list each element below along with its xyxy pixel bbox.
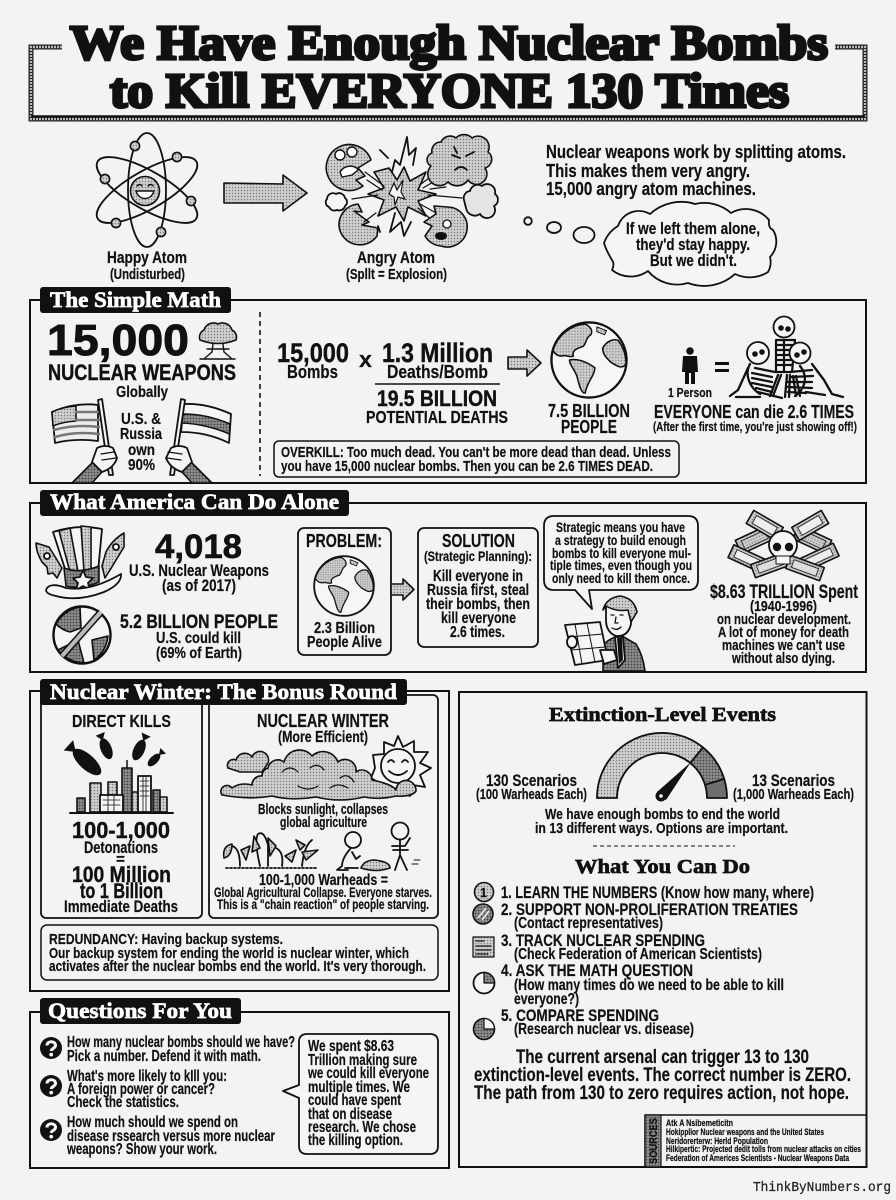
action 5: compare spending: 5. COMPARE SPENDING [501,1006,659,1025]
callout: overkill: you have 15,000 nuclear bombs. Then you can be 2.6 TIMES DEAD. [281,459,653,475]
icon: uncle sam hat with rockets [36,526,124,598]
sources box: Atk A Nsibemeticitn [666,1118,733,1128]
speech bubble: we spent: we could kill everyone [307,1065,429,1082]
stat: 4,018 weapons [129,528,269,595]
heading: what you can do: What You Can Do [575,856,750,878]
stat: 5.2 billion people: (69% of Earth) [156,645,242,662]
stat: 5.2 billion people: U.S. could kill [156,630,241,647]
icon: mushroom cloud [199,323,237,359]
title text: to Kill EVERYONE 130 Times [110,63,789,118]
action 1: learn the numbers [474,882,814,902]
heading: the simple math: The Simple Math [50,287,221,312]
thought text: they'd stay happy. [636,236,750,254]
icon: skeleton pile [730,316,843,398]
intro text: This makes them very angry. [546,160,750,181]
stat: $8.63 trillion [710,581,858,667]
action 3: track spending: 3. TRACK NUCLEAR SPENDING [501,931,705,950]
stat: 7.5 billion people: 7.5 BILLION [548,401,630,421]
question 3 [40,1114,275,1158]
stat: direct kills numbers [64,817,178,916]
panel: nuclear winter [30,679,449,991]
stat: direct kills numbers: 100 Million [72,862,171,887]
thought text: If we left them alone, [626,220,760,238]
sources box [645,1115,866,1167]
speech bubble: we spent: multiple times. We [308,1079,410,1096]
question 1: How many nuclear bombs should we have? [67,1034,295,1051]
question 2: Check the statistics. [67,1094,179,1111]
stat: direct kills numbers: = [116,851,125,868]
speech bubble: we spent: research. We chose [308,1119,416,1136]
action 4: ask the math question: 4. ASK THE MATH QUESTION [501,961,693,980]
icon: smiling sun [371,736,431,796]
action 2: support treaties: (Contact representatives) [514,915,663,932]
question 2: A foreign power or cancer? [67,1081,215,1098]
question 1: Pick a number. Defend it with math. [67,1048,261,1065]
speech bubble: strategic: only need to kill them once. [552,570,690,586]
question 3: How much should we spend on [67,1114,238,1131]
box: nuclear winter: This is a "chain reaction" of people starving. [217,897,429,912]
stat: 4,018 weapons: (as of 2017) [162,577,236,595]
footer credit: ThinkByNumbers.org [753,1181,891,1196]
box: solution: Russia first, steal [427,582,529,599]
box: nuclear winter: Global Agricultural Collapse. Everyone starves. [214,885,432,900]
icon: one person [668,347,729,400]
stat: $8.63 trillion: A lot of money for death [718,625,849,641]
callout: redundancy [41,925,438,980]
thought cloud [524,202,776,286]
action 2: support treaties: 2. SUPPORT NON-PROLIFERATION TREATIES [501,900,798,919]
label: angry atom: (Spllt = Explosion) [346,267,447,283]
icon: smoke cloud [221,750,416,800]
icon: one person: 1 Person [668,386,712,400]
label: happy atom: Happy Atom [107,248,187,267]
icon: bombs over city [63,732,173,813]
gauge caption: We have enough bombs to end the world [545,806,780,823]
box: direct kills [41,695,202,918]
equation: bombs times deaths: Bombs [287,362,338,382]
panel: the simple math [30,287,866,483]
stat: 4,018 weapons: U.S. Nuclear Weapons [129,562,269,580]
sources box: Neridorerterw: Herld Population [666,1136,768,1146]
panel: extinction and actions [459,692,866,1167]
icon: man reading map [565,596,645,671]
box: nuclear winter: global agriculture [280,815,367,831]
intro text [546,141,846,199]
gauge label: 130 scenarios: (100 Warheads Each) [476,787,587,803]
intro text: 15,000 angry atom machines. [546,178,756,199]
heading: nuclear winter: Nuclear Winter: The Bonus Round [50,679,397,704]
icon: dying plants [224,833,318,868]
stat: 15,000 weapons [47,316,236,401]
closing statement: The current arsenal can trigger 13 to 130 [516,1047,809,1068]
speech bubble: strategic [544,516,698,609]
speech bubble: strategic: a strategy to build enough [555,532,686,548]
stat: $8.63 trillion: on nuclear development. [717,612,851,628]
box: problem: PROBLEM: [306,531,382,551]
stat: direct kills numbers: Detonations [84,839,158,857]
stat: 7.5 billion people: PEOPLE [561,417,617,437]
icon: earth [551,322,627,398]
closing statement [474,1047,851,1104]
box: problem [298,528,391,655]
stat: $8.63 trillion: machines we can't use [722,638,845,654]
action 4: ask the math question [474,961,784,1008]
callout: redundancy: REDUNDANCY: Having backup systems. [49,931,283,948]
callout: redundancy: activates after the nuclear bombs end the world. It's very thorough. [49,958,426,975]
callout: overkill [274,441,679,477]
speech bubble: strategic: bombs to kill everyone mul- [552,545,691,561]
text: US and Russia own 90%: Russia [120,426,162,443]
arrow: deaths to people [508,350,541,376]
stat: 15,000 weapons: Globally [116,384,168,401]
callout: redundancy: Our backup system for ending the world is nuclear winter, which [49,945,409,962]
arrow: problem to solution [391,579,414,600]
box: solution: (Strategic Planning): [424,548,532,564]
callout: overkill: OVERKILL: Too much dead. You can't be more dead than dead. Unless [281,445,671,461]
gauge label: 13 scenarios: (1,000 Warheads Each) [733,787,854,803]
speech bubble: strategic: tiple times, even though you [550,557,692,573]
equation: bombs times deaths: POTENTIAL DEATHS [366,407,508,427]
gauge chart [597,733,727,802]
question 3: weapons? Show your work. [66,1141,217,1158]
equation: bombs times deaths: x [359,347,373,372]
speech bubble: we spent: We spent $8.63 [308,1038,394,1055]
thought text [626,220,760,270]
speech bubble: we spent: Trillion making sure [308,1052,417,1069]
box: solution: 2.6 times. [450,624,505,641]
action 1: learn the numbers: 1 [480,885,487,900]
speech bubble: we spent: that on disease [308,1106,392,1123]
label: angry atom: Angry Atom [357,248,435,267]
label: angry atom [346,248,447,283]
title banner [31,15,865,119]
text: everyone can die 2.6 times [653,402,857,434]
icon: happy atom [88,133,206,247]
gauge label: 130 scenarios: 130 Scenarios [486,772,577,790]
gauge caption: in 13 different ways. Options are important. [535,820,788,837]
stat: 15,000 weapons: 15,000 [47,316,189,365]
action 2: support treaties [473,900,798,932]
text: US and Russia own 90%: U.S. & [121,411,161,428]
equation: bombs times deaths: 19.5 BILLION [377,386,497,411]
equation: bombs times deaths: Deaths/Bomb [387,362,488,382]
icon: crossed flags with hands [52,399,231,483]
box: solution [418,528,538,647]
box: nuclear winter: NUCLEAR WINTER [257,711,389,731]
box: solution: Kill everyone in [433,568,523,585]
action 5: compare spending: (Research nuclear vs. disease) [514,1021,694,1038]
equation: bombs times deaths: 15,000 [277,338,349,368]
heading: questions for you: Questions For You [48,998,232,1023]
stat: 5.2 billion people [120,612,278,662]
box: nuclear winter: (More Efficient) [278,729,368,746]
speech bubble: we spent [283,1034,438,1154]
action 4: ask the math question: (How many times do we need to be able to kill [514,977,784,994]
heading: extinction-level events: Extinction-Level Events [549,704,776,726]
action 4: ask the math question: everyone?) [514,991,579,1008]
stat: 4,018 weapons: 4,018 [155,528,242,566]
label: happy atom [107,248,187,283]
icon: cash pile with skull [728,510,839,581]
stat: direct kills numbers: 100-1,000 [72,817,170,843]
box: solution: their bombs, then [426,596,530,613]
heading: what america can do alone: What America Can Do Alone [50,489,339,514]
box: problem: People Alive [307,634,382,651]
gauge caption [535,806,788,837]
box: direct kills: DIRECT KILLS [72,711,171,731]
gauge label: 13 scenarios: 13 Scenarios [752,772,835,790]
label: happy atom: (Undisturbed) [110,267,185,283]
speech bubble: we spent: the killing option. [308,1132,403,1149]
question 2 [40,1068,227,1111]
box: solution: kill everyone [441,610,516,627]
equation: bombs times deaths [277,338,508,427]
action 3: track spending [473,931,762,963]
gauge label: 130 scenarios [476,772,587,803]
gauge label: 13 scenarios [733,772,854,803]
text: US and Russia own 90%: 90% [128,457,155,474]
icon: angry atom explosion [326,135,498,247]
stat: 15,000 weapons: NUCLEAR WEAPONS [48,360,236,385]
speech bubble: strategic: Strategic means you have [556,519,685,535]
sources box: SOURCES [648,1118,660,1164]
action 3: track spending: (Check Federation of American Scientists) [514,946,762,963]
icon: crossed-out earth [54,606,110,664]
stat: 5.2 billion people: 5.2 BILLION PEOPLE [120,612,278,633]
box: solution: SOLUTION [442,531,515,551]
text: US and Russia own 90% [120,411,162,474]
thought text: But we didn't. [650,252,737,270]
box: nuclear winter: Blocks sunlight, collapses [258,802,388,818]
action 5: compare spending [474,1006,694,1040]
stat: $8.63 trillion: (1940-1996) [750,599,817,615]
title text [70,15,828,118]
speech bubble: we spent: could have spent [308,1092,401,1109]
action 1: learn the numbers: 1. LEARN THE NUMBERS (Know how many, where) [501,884,814,902]
question 2: What's more likely to kIll you: [67,1068,227,1085]
icon: starving people [337,822,420,870]
box: problem: 2.3 Billion [314,620,375,637]
stat: 7.5 billion people [548,401,630,437]
question 1 [40,1034,295,1065]
stat: $8.63 trillion: without also dying. [731,651,835,667]
text: US and Russia own 90%: own [128,442,155,459]
box: nuclear winter: 100-1,000 Warheads = [259,872,388,889]
stat: direct kills numbers: to 1 Billion [80,880,163,903]
title text: We Have Enough Nuclear Bombs [70,15,828,70]
equation: bombs times deaths: 1.3 Million [382,338,493,368]
question 3: disease rssearch versus more nuclear [67,1128,275,1145]
stat: direct kills numbers: Immediate Deaths [64,898,178,916]
panel: questions for you [30,998,449,1168]
arrow: atom to explosion [224,175,307,211]
sources box: Hokipplior Nuclear weapons and the United States [666,1127,824,1137]
panel: what america can do alone [30,489,866,672]
box: nuclear winter [209,695,438,918]
